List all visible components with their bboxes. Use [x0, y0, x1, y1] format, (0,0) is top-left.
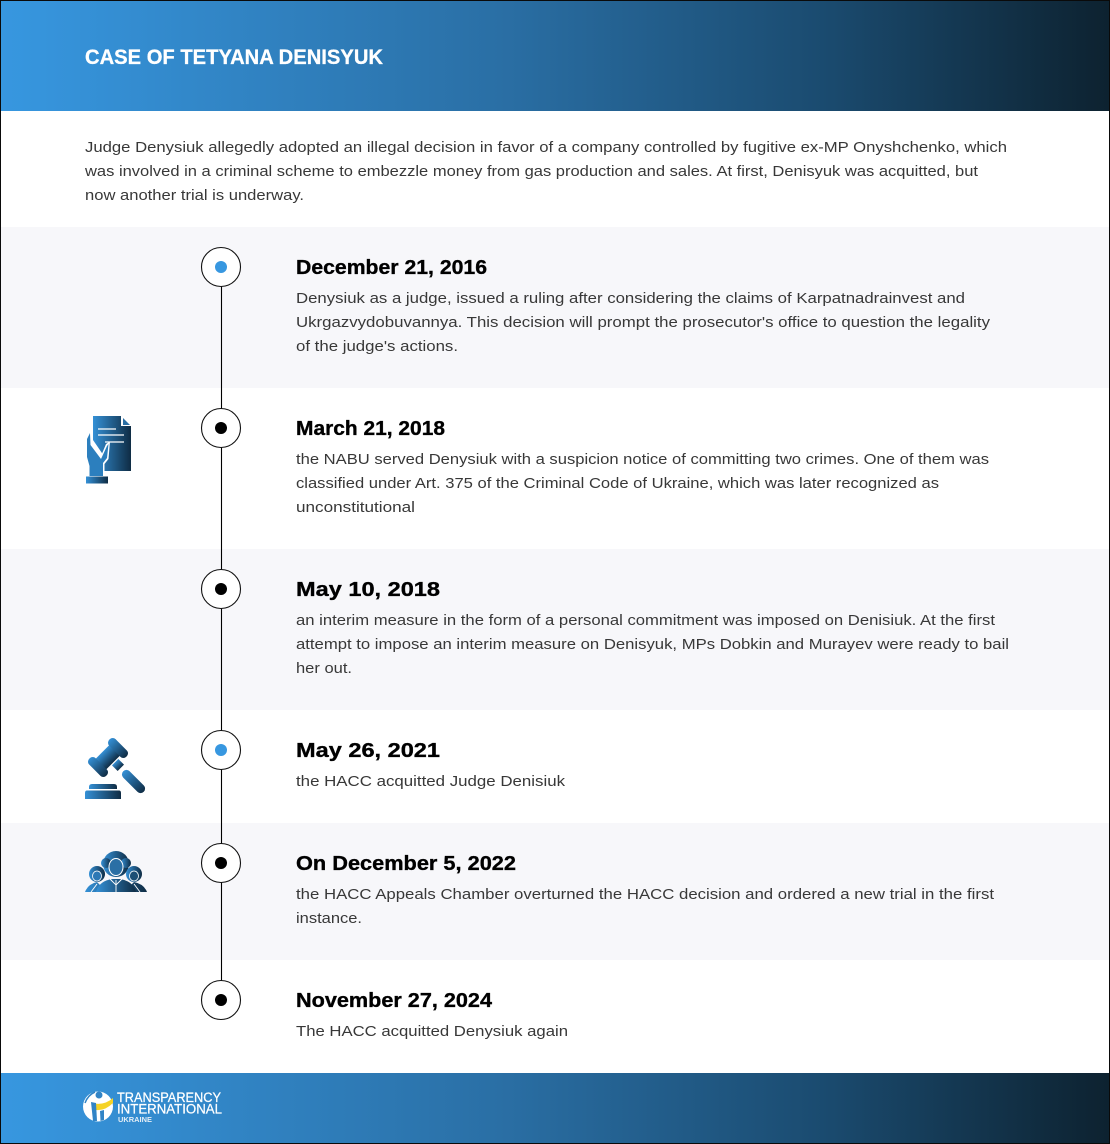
entry: May 10, 2018: attempt to impose an interim measure on Denisyuk, MPs Dobkin and Murayev were ready to bail — [296, 636, 1009, 653]
entry: May 10, 2018: an interim measure in the form of a personal commitment was imposed on Denisiuk. At the first — [296, 612, 996, 629]
timeline marker: December 21, 2016 — [202, 248, 240, 286]
entry: March 21, 2018: classified under Art. 375 of the Criminal Code of Ukraine, which was later recognized as — [296, 475, 939, 492]
entry: December 21, 2016 — [296, 256, 991, 355]
entry: March 21, 2018: unconstitutional — [296, 499, 415, 516]
icon: gavel — [85, 736, 147, 799]
timeline line — [220, 267, 222, 1000]
entry: March 21, 2018: March 21, 2018 — [296, 417, 445, 440]
entry: December 21, 2016: Ukrgazvydobuvannya. This decision will prompt the prosecutor's office to question the legality — [296, 314, 991, 331]
entry: November 27, 2024 — [296, 989, 568, 1040]
timeline marker: December 5, 2022 — [202, 844, 240, 882]
entry: December 5, 2022: On December 5, 2022 — [296, 852, 516, 875]
intro text: now another trial is underway. — [85, 187, 304, 204]
row background: December 21, 2016 — [1, 227, 1109, 388]
entry: May 10, 2018 — [296, 578, 1009, 677]
row background: December 5, 2022 — [1, 823, 1109, 960]
entry: December 5, 2022: instance. — [296, 910, 362, 927]
timeline marker: May 10, 2018 — [202, 570, 240, 608]
entry: March 21, 2018: the NABU served Denysiuk with a suspicion notice of committing two crimes. One of them was — [296, 451, 989, 468]
footer band — [1, 1073, 1109, 1143]
logo: Transparency International Ukraine: TRANSPARENCY — [117, 1090, 221, 1105]
entry: May 26, 2021: the HACC acquitted Judge Denisiuk — [296, 773, 566, 790]
entry: November 27, 2024: November 27, 2024 — [296, 989, 493, 1012]
entry: March 21, 2018 — [296, 417, 989, 516]
logo: Transparency International Ukraine: UKRAINE — [118, 1117, 152, 1124]
icon: hand holding document — [86, 415, 132, 484]
entry: May 10, 2018: her out. — [296, 660, 352, 677]
logo: Transparency International Ukraine: INTERNATIONAL — [117, 1102, 222, 1116]
entry: December 5, 2022 — [296, 852, 995, 927]
timeline marker: November 27, 2024 — [202, 980, 240, 1020]
entry: May 10, 2018: May 10, 2018 — [296, 578, 440, 601]
logo: Transparency International Ukraine — [83, 1090, 222, 1124]
entry: December 21, 2016: of the judge's actions. — [296, 338, 458, 355]
entry: November 27, 2024: The HACC acquitted Denysiuk again — [296, 1023, 568, 1040]
timeline marker: March 21, 2018 — [202, 408, 240, 448]
entry: December 21, 2016: Denysiuk as a judge, issued a ruling after considering the claims of Karpatnadrainvest and — [296, 290, 965, 307]
icon: group of judges — [85, 851, 147, 892]
entry: December 21, 2016: December 21, 2016 — [296, 256, 487, 279]
title: CASE OF TETYANA DENISYUK — [85, 45, 383, 69]
row background: May 10, 2018 — [1, 549, 1109, 710]
header band — [1, 1, 1109, 111]
entry: May 26, 2021: May 26, 2021 — [296, 739, 440, 762]
entry: May 26, 2021 — [296, 739, 566, 790]
intro text — [84, 139, 1007, 204]
timeline marker: May 26, 2021 — [202, 730, 240, 770]
intro text: Judge Denysiuk allegedly adopted an illegal decision in favor of a company controlled by fugitive ex-MP Onyshchenko, which — [85, 139, 1007, 156]
intro text: was involved in a criminal scheme to embezzle money from gas production and sales. At first, Denisyuk was acquitted, but — [84, 163, 979, 180]
entry: December 5, 2022: the HACC Appeals Chamber overturned the HACC decision and ordered a new trial in the first — [296, 886, 995, 903]
